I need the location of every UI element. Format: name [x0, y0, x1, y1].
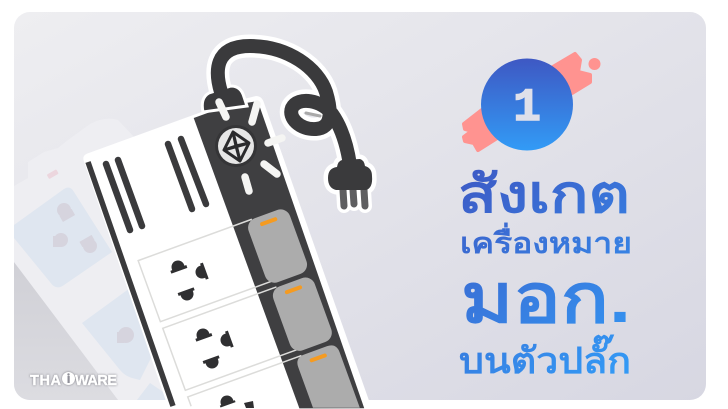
- switch indicators: [262, 219, 325, 360]
- logo: Thaiware: [30, 372, 117, 389]
- heading: มอก.: [461, 261, 631, 337]
- power plug: [328, 159, 372, 206]
- number badge: 1: [513, 82, 541, 134]
- strip black stripes: [88, 139, 206, 406]
- ghost power strip background: [14, 170, 164, 400]
- heading: สังเกต: [458, 166, 630, 224]
- switch buttons: [245, 207, 360, 408]
- heading: บนตัวปลั๊ก: [459, 333, 631, 381]
- socket frames: [138, 219, 301, 406]
- logo: Thaiware: WARE: [75, 373, 117, 389]
- heading: เครื่องหมาย: [460, 222, 632, 260]
- loop highlight: [306, 113, 320, 116]
- glow rays: [219, 102, 282, 191]
- strip dark control panel: [194, 101, 364, 408]
- logo: Thaiware: THA: [30, 373, 62, 389]
- strip cord cap: [202, 86, 247, 112]
- socket holes: [168, 258, 254, 408]
- certification mark: [215, 125, 257, 167]
- cord and plug white outline: [218, 46, 372, 206]
- pink splash: [464, 54, 600, 150]
- heading: [458, 166, 632, 381]
- strip white body: [83, 96, 372, 409]
- power strip: [83, 96, 372, 409]
- power cord: [218, 46, 350, 165]
- number badge: [481, 58, 573, 150]
